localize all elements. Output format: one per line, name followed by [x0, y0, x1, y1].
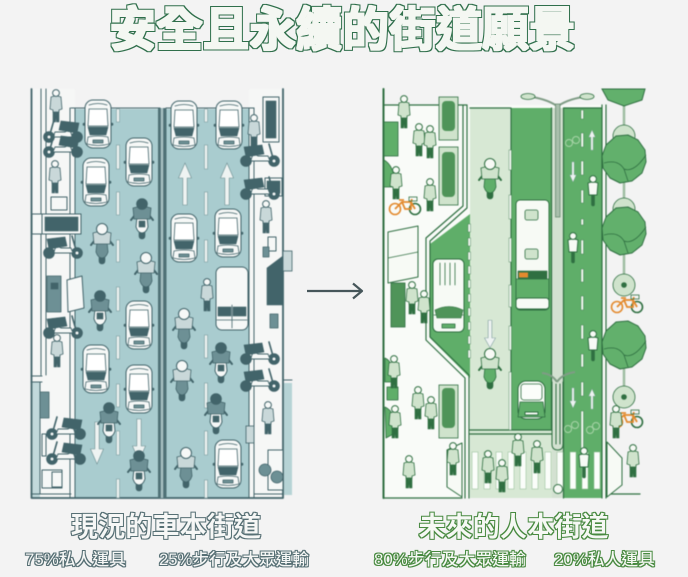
cyclists — [568, 176, 598, 478]
sidewalks and kerbs — [31, 89, 292, 498]
cars — [81, 100, 244, 488]
billboard and benches — [384, 160, 418, 438]
bicycle lane symbols — [564, 136, 600, 434]
panel: future people-centred street — [384, 89, 646, 498]
public bikes — [390, 197, 642, 428]
road arrows — [90, 163, 234, 464]
title: 安全且永續的街道願景 — [110, 3, 576, 56]
kerb lines — [384, 89, 640, 498]
panel: current car-centred street — [31, 89, 292, 498]
white van — [216, 267, 248, 330]
heading: future street: 未來的人本街道 — [418, 511, 609, 542]
stat: 25% walking and transit: 25%步行及大眾運輸 — [159, 550, 309, 569]
lane dashes — [468, 110, 584, 449]
green car — [518, 381, 545, 419]
street lamps — [521, 94, 594, 450]
heading: current street: 現況的車本街道 — [71, 511, 261, 542]
road arrows — [484, 130, 595, 409]
parked scooters — [44, 120, 280, 464]
crosswalk — [472, 452, 600, 489]
bus — [516, 200, 549, 310]
lane markings — [116, 109, 208, 498]
pedestrians — [49, 90, 274, 434]
stat: 20% private vehicles: 20%私人運具 — [554, 550, 655, 569]
trees — [602, 89, 646, 408]
centre median — [158, 108, 166, 498]
bollard — [554, 484, 562, 494]
motorcycles — [479, 158, 501, 389]
pedestrians — [388, 96, 639, 492]
planters — [384, 97, 458, 438]
road surface — [75, 109, 249, 498]
delivery van — [433, 259, 464, 332]
arrow: from current to future — [307, 284, 362, 298]
ground — [384, 105, 605, 498]
kerb bulb-outs — [447, 442, 622, 497]
street furniture — [32, 97, 292, 490]
motorcycles — [89, 198, 232, 491]
stat: 80% walking and transit: 80%步行及大眾運輸 — [374, 550, 527, 569]
stat: 75% private vehicles: 75%私人運具 — [25, 550, 126, 569]
green lane with bulb-outs — [430, 108, 602, 498]
